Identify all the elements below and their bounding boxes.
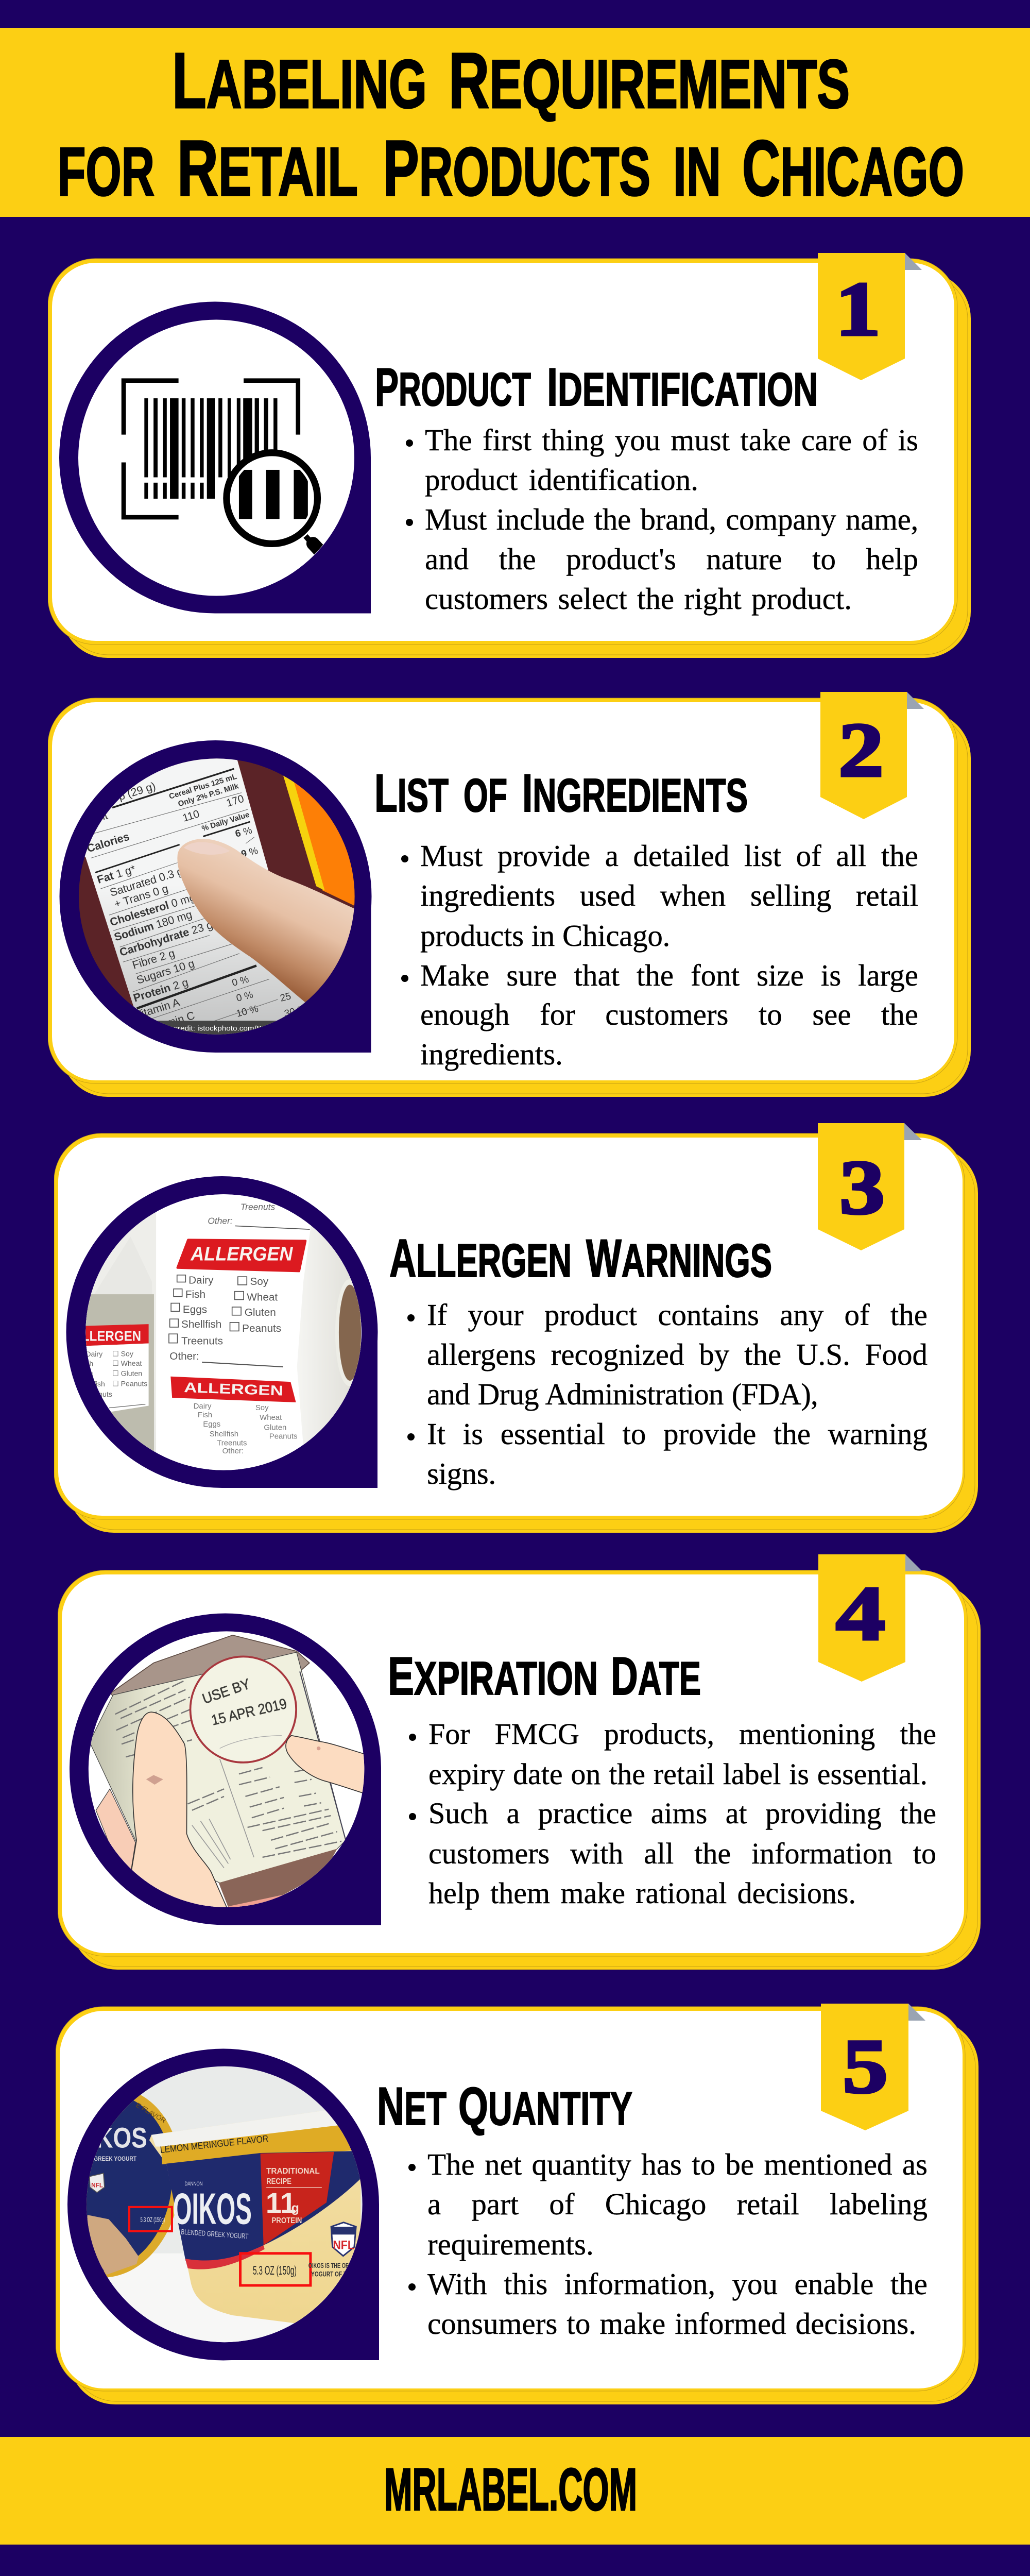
photo: finger on nutrition label in pin (60, 740, 372, 1053)
photo: allergen label roll in pin: nuts (98, 1390, 112, 1398)
photo: allergen label roll in pin: Treenuts (181, 1335, 223, 1347)
bullet list 3: If your product contains any of the (427, 1298, 928, 1332)
photo: allergen label roll in pin: Eggs (203, 1420, 220, 1429)
bullet list 4 (409, 1717, 936, 1910)
photo: finger on nutrition label in pin: Calories (85, 830, 131, 855)
photo: yogurt cup net weight in pin: RECIPE (266, 2177, 291, 2186)
photo: finger on nutrition label in pin: Fibre 2 g (131, 946, 176, 972)
photo: yogurt cup net weight in pin: YOGURT OF THE (311, 2270, 354, 2278)
photo: allergen label roll in pin: Fish (198, 1411, 212, 1419)
photo: finger on nutrition label in pin: Vitamin A (133, 995, 181, 1022)
number ribbon (818, 1123, 922, 1250)
card background (48, 259, 971, 658)
photo: finger on nutrition label in pin: Sodium 180 mg (113, 908, 194, 943)
photo: finger on nutrition label in pin: 30 % (283, 1004, 307, 1020)
card 2 graphics (48, 692, 971, 1097)
bullet list 1: product identification. (425, 463, 698, 497)
bullet list 3: It is essential to provide the warning (427, 1417, 928, 1451)
photo: use-by date on cup in pin (70, 1614, 381, 1925)
photo: allergen label roll in pin: ALLERGEN (73, 1328, 141, 1344)
bullet list 1: Must include the brand, company name, (425, 502, 918, 536)
photo: yogurt cup net weight in pin: KOS (96, 2122, 147, 2154)
bullet list 2: enough for customers to see the (420, 997, 918, 1031)
photo: finger on nutrition label in pin: Protein 2 g (132, 975, 190, 1005)
header band (0, 28, 1030, 217)
title: REQUIREMENTS (449, 37, 850, 125)
title (58, 37, 964, 212)
bullet list 4: customers with all the information to (428, 1837, 936, 1870)
panel: 5 net quantity (56, 2004, 978, 2404)
photo: allergen label roll in pin: lfish (92, 1380, 105, 1388)
photo: yogurt cup net weight in pin: BLENDED GREEK YOGURT (181, 2228, 249, 2241)
photo: finger on nutrition label in pin: Vitamin C (147, 1009, 196, 1035)
heading (377, 2077, 632, 2137)
number ribbon (818, 1554, 922, 1682)
photo: allergen label roll in pin: ☐ Wheat (112, 1359, 142, 1367)
bullet list 4: For FMCG products, mentioning the (428, 1717, 936, 1751)
bullet list 4: expiry date on the retail label is essential. (428, 1757, 928, 1791)
panel: 2 list of ingredients (48, 692, 971, 1097)
photo: finger on nutrition label in pin: 9 % (240, 845, 259, 860)
photo: finger on nutrition label in pin: Saturated 0.3 g (108, 865, 184, 899)
bullet list 4: Such a practice aims at providing the (428, 1797, 936, 1830)
heading: ALLERGEN (389, 1229, 572, 1289)
bullet list 5: a part of Chicago retail labeling (427, 2187, 928, 2221)
card 5 graphics (56, 2004, 978, 2404)
photo: yogurt cup net weight in pin: g (291, 2201, 299, 2215)
photo: yogurt cup net weight in pin: GREEK YOGURT (94, 2156, 136, 2162)
panel: 1 product identification (48, 253, 971, 658)
photo: finger on nutrition label in pin: 25 (279, 991, 292, 1004)
title: FOR (58, 133, 154, 210)
heading (389, 1229, 772, 1289)
photo: allergen label roll in pin: Treenuts (217, 1439, 247, 1448)
photo: allergen label roll in pin: Dairy (194, 1402, 212, 1411)
photo: allergen label roll in pin: Eggs (183, 1304, 207, 1316)
title: RETAIL (177, 124, 358, 212)
photo: allergen label roll in pin: gs (85, 1370, 93, 1378)
bullet list 3: allergens recognized by the U.S. Food (427, 1337, 928, 1371)
photo: allergen label roll in pin (66, 1176, 378, 1488)
photo: yogurt cup net weight in pin: DANNON (184, 2181, 203, 2187)
bullet list 5: The net quantity has to be mentioned as (427, 2147, 928, 2181)
heading: NET (377, 2077, 447, 2137)
title: LABELING (172, 37, 427, 125)
bullet list 2: ingredients used when selling retail (420, 878, 918, 912)
title: PRODUCTS (383, 124, 650, 212)
bullet list 4: help them make rational decisions. (428, 1876, 856, 1910)
photo: finger on nutrition label in pin: Fat 1 g* (95, 862, 138, 886)
heading: QUANTITY (458, 2077, 632, 2137)
photo: allergen label roll in pin: Peanuts (269, 1432, 297, 1440)
photo: yogurt cup net weight in pin: PROTEIN (271, 2216, 302, 2225)
bullet list 3: and Drug Administration (FDA), (427, 1377, 818, 1411)
photo: finger on nutrition label in pin: + Trans 0 g (113, 882, 169, 910)
bullet list 2: Must provide a detailed list of all the (420, 839, 918, 873)
bullet list 5 (408, 2147, 928, 2341)
bullet list 3 (407, 1298, 928, 1490)
heading: INGREDIENTS (522, 764, 748, 823)
number 2: 2 (838, 707, 884, 793)
photo: yogurt cup net weight in pin: 11 (266, 2187, 296, 2219)
photo: allergen label roll in pin: Shellfish (181, 1318, 221, 1330)
bullet list 5: consumers to make informed decisions. (427, 2307, 916, 2341)
photo: allergen label roll in pin: Soy (255, 1403, 269, 1412)
card background (54, 1133, 978, 1533)
photo: yogurt cup net weight in pin: E FLAVOR (135, 2101, 167, 2124)
card background (58, 1570, 981, 1970)
photo: allergen label roll in pin: Gluten (264, 1423, 286, 1432)
bullet list 1: and the product's nature to help (425, 542, 918, 576)
heading (374, 764, 748, 823)
photo: allergen label roll in pin: Soy (250, 1276, 269, 1287)
photo: allergen label roll in pin: sh (85, 1359, 93, 1367)
photo: allergen label roll in pin: ☐ Soy (112, 1349, 134, 1358)
photo: allergen label roll in pin: Shellfish (210, 1430, 238, 1438)
bullet list 1: The first thing you must take care of is (425, 423, 918, 457)
photo: finger on nutrition label in pin: 110 (181, 808, 201, 824)
photo: finger on nutrition label in pin: Only 2% P.S. Milk (177, 782, 240, 808)
photo: yogurt cup net weight in pin (67, 2048, 379, 2361)
photo: allergen label roll in pin: ☐ Gluten (112, 1369, 142, 1377)
bullet list 2: ingredients. (420, 1037, 563, 1071)
bullet list 2: products in Chicago. (420, 919, 670, 953)
number 1: 1 (835, 266, 881, 352)
photo: allergen label roll in pin: Other: (208, 1215, 233, 1226)
bullet list 1 (406, 423, 918, 616)
bullet list 1: customers select the right product. (425, 582, 852, 616)
photo: allergen label roll in pin: Other: (169, 1350, 199, 1362)
photo: yogurt cup net weight in pin: 5.3 OZ (150g) (141, 2215, 165, 2224)
photo: allergen label roll in pin: Fish (185, 1289, 205, 1300)
card 4 graphics (58, 1554, 981, 1970)
photo: finger on nutrition label in pin: 0 % (235, 989, 254, 1004)
photo: finger on nutrition label in pin: Carbohydrate 23 g (118, 918, 214, 959)
number 5: 5 (843, 2024, 888, 2109)
photo: finger on nutrition label in pin: Image credit: istockphoto.com/Se (150, 1024, 266, 1032)
card background (48, 698, 971, 1097)
photo: finger on nutrition label in pin: nt (96, 808, 109, 824)
photo: finger on nutrition label in pin: 6 % (234, 825, 253, 840)
bullet list 5: requirements. (427, 2227, 594, 2261)
number 4: 4 (836, 1571, 885, 1656)
photo: allergen label roll in pin: Dairy (85, 1350, 103, 1358)
photo: finger on nutrition label in pin: % Daily Value (201, 810, 251, 833)
photo: allergen label roll in pin: ALLERGEN (190, 1243, 294, 1265)
photo: finger on nutrition label in pin: 170 (225, 793, 245, 809)
photo: yogurt cup net weight in pin: LEMON MERINGUE FLAVOR (160, 2133, 269, 2155)
photo: allergen label roll in pin: Wheat (260, 1413, 282, 1422)
photo: yogurt cup net weight in pin: OIKOS (173, 2185, 252, 2234)
bullet list 3: signs. (427, 1456, 496, 1490)
number 3: 3 (839, 1145, 885, 1230)
photo: finger on nutrition label in pin: 0 % (231, 974, 250, 989)
photo: allergen label roll in pin: Gluten (245, 1307, 276, 1318)
photo: allergen label roll in pin: Other: (222, 1447, 244, 1455)
photo: finger on nutrition label in pin: Cereal Plus 125 mL (168, 772, 238, 801)
icon: barcode with magnifier in pin (59, 302, 371, 613)
bullet list 5: With this information, you enable the (427, 2267, 928, 2301)
heading: PRODUCT (375, 358, 531, 417)
panel: 4 expiration date (58, 1554, 981, 1970)
photo: yogurt cup net weight in pin: NFL (333, 2238, 354, 2252)
heading: DATE (611, 1647, 701, 1706)
photo: yogurt cup net weight in pin: TRADITIONAL (266, 2167, 320, 2176)
photo: finger on nutrition label in pin: p (29 g) (117, 779, 157, 803)
heading: LIST (374, 764, 449, 823)
heading: EXPIRATION (388, 1647, 598, 1706)
photo: allergen label roll in pin: ☐ Peanuts (112, 1379, 147, 1387)
title: IN (673, 133, 721, 210)
number ribbon (821, 2004, 925, 2130)
photo: finger on nutrition label in pin: Sugars 10 g (135, 957, 196, 987)
card 1 graphics (48, 253, 971, 658)
number ribbon (818, 253, 922, 380)
heading: WARNINGS (586, 1229, 772, 1289)
photo: allergen label roll in pin: Treenuts (241, 1201, 275, 1212)
photo: finger on nutrition label in pin: 10 % (235, 1004, 260, 1020)
photo: use-by date on cup in pin: USE BY (200, 1675, 252, 1707)
heading (375, 358, 818, 417)
bullet list 2: Make sure that the font size is large (420, 958, 918, 992)
number ribbon (820, 692, 924, 819)
card background (56, 2007, 978, 2404)
photo: yogurt cup net weight in pin: NFL (91, 2182, 103, 2189)
heading: IDENTIFICATION (547, 358, 818, 417)
bullet list 2 (401, 839, 918, 1071)
photo: yogurt cup net weight in pin: 5.3 OZ (150g) (253, 2264, 297, 2278)
photo: yogurt cup net weight in pin: OIKOS IS THE OFFICIAL (308, 2261, 364, 2269)
card 3 graphics (54, 1123, 978, 1533)
photo: allergen label roll in pin: ALLERGEN (184, 1379, 283, 1399)
footer website text: MRLABEL.COM (384, 2456, 637, 2523)
heading: OF (464, 770, 507, 822)
footer band (0, 2437, 1030, 2545)
photo: finger on nutrition label in pin: Cholesterol 0 mg (108, 890, 197, 928)
photo: allergen label roll in pin: Peanuts (242, 1323, 281, 1334)
photo: use-by date on cup in pin: 15 APR 2019 (210, 1695, 288, 1728)
photo: allergen label roll in pin: Wheat (247, 1292, 278, 1303)
panel: 3 allergen warnings (54, 1123, 978, 1533)
photo: allergen label roll in pin: Dairy (188, 1274, 214, 1286)
